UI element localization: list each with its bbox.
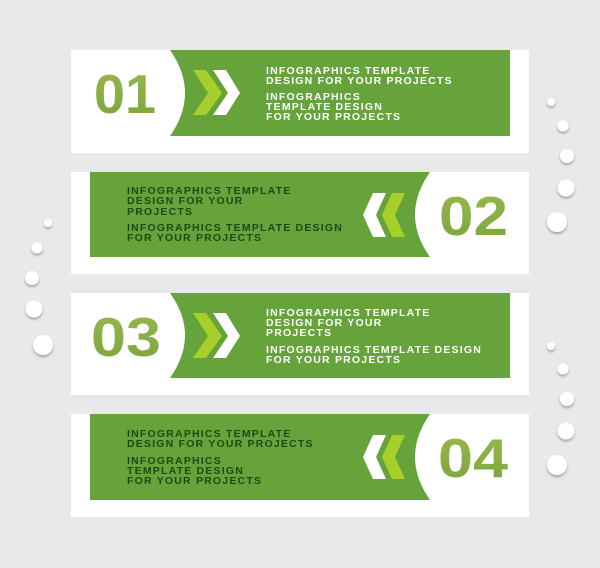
text 01: INFOGRAPHICS TEMPLATE — [266, 65, 430, 77]
panel: step 03 — [60, 293, 540, 407]
green band 02 — [90, 172, 430, 257]
text 03 — [266, 307, 482, 366]
number 03: 03 — [91, 306, 161, 368]
text 03: INFOGRAPHICS TEMPLATE DESIGN — [266, 344, 482, 356]
text 02: INFOGRAPHICS TEMPLATE — [127, 185, 291, 197]
number 01: 01 — [94, 63, 156, 125]
text 02: PROJECTS — [127, 206, 193, 218]
green band 04 — [90, 414, 430, 500]
dots: right lower — [547, 342, 574, 475]
text 01: INFOGRAPHICS — [266, 91, 361, 103]
text 04: INFOGRAPHICS TEMPLATE — [127, 428, 291, 440]
panel: step 04 — [60, 414, 540, 529]
text 01: FOR YOUR PROJECTS — [266, 111, 401, 123]
icon: chevrons left 04 — [363, 435, 405, 479]
text 03: INFOGRAPHICS TEMPLATE — [266, 307, 430, 319]
number 02: 02 — [439, 185, 508, 247]
panel: step 01 — [60, 50, 540, 165]
text 04: INFOGRAPHICS — [127, 455, 222, 467]
text 02 — [127, 185, 343, 244]
text 02: DESIGN FOR YOUR — [127, 195, 243, 207]
text 03: DESIGN FOR YOUR — [266, 317, 382, 329]
text 04: FOR YOUR PROJECTS — [127, 475, 262, 487]
text 01 — [266, 65, 453, 123]
text 01: DESIGN FOR YOUR PROJECTS — [266, 75, 453, 87]
text 01: TEMPLATE DESIGN — [266, 101, 383, 113]
text 02: INFOGRAPHICS TEMPLATE DESIGN — [127, 222, 343, 234]
dots: left — [25, 219, 53, 355]
text 03: FOR YOUR PROJECTS — [266, 354, 401, 366]
text 02: FOR YOUR PROJECTS — [127, 232, 262, 244]
text 04 — [127, 428, 314, 487]
icon: chevrons right 01 — [193, 70, 240, 115]
dots: right upper — [547, 98, 574, 232]
number 04: 04 — [438, 427, 508, 489]
green band 01 — [170, 50, 510, 136]
icon: chevrons right 03 — [193, 313, 240, 358]
panel: step 02 — [60, 172, 540, 286]
text 03: PROJECTS — [266, 327, 332, 339]
icon: chevrons left 02 — [363, 193, 405, 237]
text 04: TEMPLATE DESIGN — [127, 465, 244, 477]
text 04: DESIGN FOR YOUR PROJECTS — [127, 438, 314, 450]
green band 03 — [170, 293, 510, 378]
